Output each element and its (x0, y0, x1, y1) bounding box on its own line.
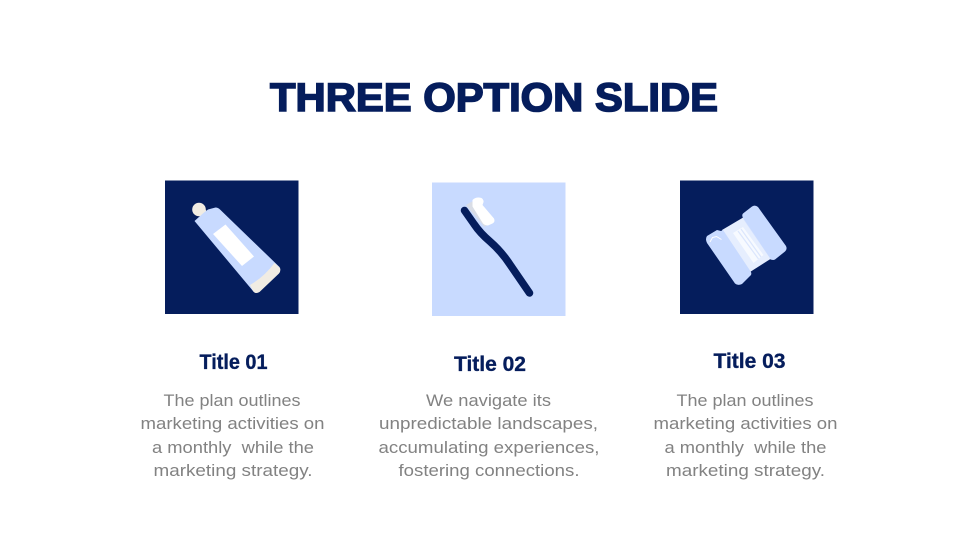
title: THREE OPTION SLIDE (270, 76, 718, 120)
text block: option 2 description (378, 391, 600, 480)
text block: option 3 description: a monthly while the (664, 438, 826, 457)
text block: option 1 description (140, 391, 324, 480)
text block: option 1 description: The plan outlines (164, 391, 300, 410)
heading: Title 01: Title 01 (200, 351, 268, 374)
icon: toothpaste tube (165, 180, 298, 314)
text block: option 2 description: accumulating experiences, (378, 438, 600, 457)
icon: dental floss (680, 180, 814, 314)
text block: option 2 description: unpredictable landscapes, (379, 414, 598, 433)
panel: option 3 (654, 180, 838, 480)
text block: option 2 description: We navigate its (426, 391, 551, 410)
heading: Title 02: Title 02 (454, 353, 526, 376)
text block: option 3 description: marketing strategy. (666, 461, 825, 480)
panel: option 1 (140, 180, 324, 480)
text block: option 1 description: marketing strategy. (154, 461, 312, 480)
text block: option 3 description (654, 391, 838, 480)
text block: option 1 description: a monthly while the (152, 438, 314, 457)
icon: toothbrush (432, 182, 566, 316)
text block: option 2 description: fostering connections. (398, 461, 580, 480)
text block: option 3 description: marketing activities on (654, 414, 838, 433)
text block: option 1 description: marketing activities on (140, 414, 324, 433)
panel: option 2 (378, 182, 600, 480)
heading: Title 03: Title 03 (714, 350, 785, 373)
text block: option 3 description: The plan outlines (676, 391, 814, 410)
